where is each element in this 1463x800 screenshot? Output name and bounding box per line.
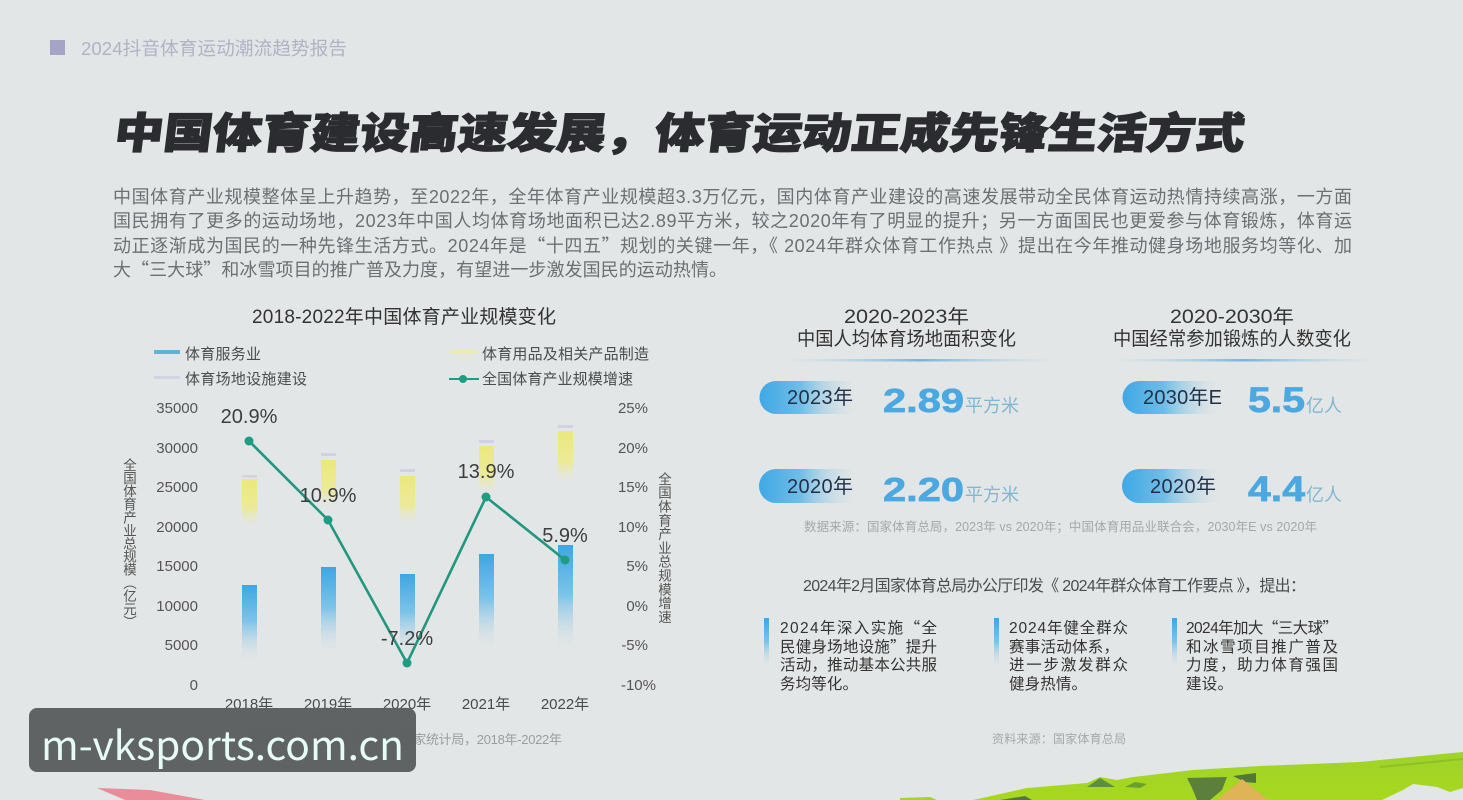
policy item 2: 2024年健全群众 bbox=[1009, 619, 1128, 637]
stat: 2020 bbox=[1122, 469, 1342, 509]
stat: 2020 bbox=[759, 469, 1019, 508]
left axis labels: 25000 bbox=[156, 479, 198, 496]
left axis labels: 30000 bbox=[156, 440, 198, 457]
chart legend: 全国体育产业规模增速 bbox=[482, 370, 633, 388]
x axis labels: 2019年 bbox=[304, 696, 352, 713]
stat: 2023: 2023年 bbox=[787, 386, 853, 409]
intro text block bbox=[113, 187, 1352, 282]
stats source: 数据来源：国家体育总局，2023年 vs 2020年；中国体育用品业联合会，2030年E vs 2020年 bbox=[804, 519, 1317, 534]
panel heading: 2020-2023年 bbox=[844, 306, 969, 328]
data labels: 5.9% bbox=[542, 525, 588, 547]
panel heading bbox=[1113, 306, 1351, 350]
right axis labels: 0% bbox=[626, 598, 648, 615]
watermark: m-vksports.com.cn bbox=[41, 714, 404, 772]
stat: 2030E: 5.5 bbox=[1248, 381, 1305, 420]
left axis labels: 20000 bbox=[156, 519, 198, 536]
decoration: pink ribbon bbox=[97, 788, 205, 800]
left axis labels: 10000 bbox=[156, 598, 198, 615]
right axis labels: 10% bbox=[618, 519, 648, 536]
growth rate line bbox=[244, 436, 570, 668]
policy source: 资料来源：国家体育总局 bbox=[992, 731, 1126, 746]
policy item 3: 和冰雪项目推广普及 bbox=[1186, 638, 1338, 656]
stat: 2030E: 亿人 bbox=[1306, 396, 1342, 416]
policy item 2: 健身热情。 bbox=[1009, 675, 1087, 693]
panel: regular exercisers bbox=[1113, 306, 1370, 509]
intro text block: 大“三大球”和冰雪项目的推广普及力度，有望进一步激发国民的运动热情。 bbox=[113, 256, 727, 282]
stat: 2020: 亿人 bbox=[1306, 485, 1342, 505]
policy item 1: 务均等化。 bbox=[780, 675, 858, 693]
right axis labels: 25% bbox=[618, 400, 648, 417]
stat: 2020: 2.20 bbox=[883, 471, 964, 508]
decoration: grass hill and tent bbox=[900, 752, 1463, 800]
policy item 2: 赛事活动体系， bbox=[1009, 637, 1119, 656]
stat: 2020: 2020年 bbox=[1150, 475, 1216, 498]
left axis labels: 35000 bbox=[156, 400, 198, 417]
stat: 2023: 2.89 bbox=[883, 382, 964, 419]
right axis labels bbox=[618, 400, 656, 694]
left axis labels: 5000 bbox=[165, 637, 198, 654]
stat: 2020: 平方米 bbox=[965, 485, 1019, 505]
intro text block: 动正逐渐成为国民的一种先锋生活方式。2024年是“十四五”规划的关键一年，《 2024年群众体育工作热点 》提出在今年推动健身场地服务均等化、加 bbox=[113, 232, 1352, 258]
left axis labels: 0 bbox=[190, 677, 198, 694]
stacked bars bbox=[242, 425, 573, 665]
data labels: 20.9% bbox=[221, 406, 278, 428]
policy heading: 2024年2月国家体育总局办公厅印发《 2024年群众体育工作要点 》，提出： bbox=[803, 572, 1306, 596]
panel heading: 中国经常参加锻炼的人数变化 bbox=[1113, 328, 1351, 350]
right axis labels: 15% bbox=[618, 479, 648, 496]
chart legend bbox=[154, 346, 649, 388]
intro text block: 中国体育产业规模整体呈上升趋势，至2022年，全年体育产业规模超3.3万亿元，国内体育产业建设的高速发展带动全民体育运动热情持续高涨，一方面 bbox=[113, 187, 1352, 207]
chart title: 2018-2022年中国体育产业规模变化 bbox=[252, 306, 556, 328]
x axis labels: 2021年 bbox=[462, 696, 510, 713]
stat: 2030E bbox=[1122, 381, 1342, 420]
report header: 2024抖音体育运动潮流趋势报告 bbox=[81, 38, 347, 59]
policy item 1: 活动，推动基本公共服 bbox=[780, 656, 937, 674]
stat: 2020: 2020年 bbox=[787, 475, 853, 498]
panel: industry scale chart bbox=[120, 306, 675, 747]
chart source: 数据来源：国家体育总局，国家统计局，2018年-2022年 bbox=[248, 732, 562, 747]
panel heading: 2020-2030年 bbox=[1170, 306, 1294, 328]
left axis labels: 15000 bbox=[156, 558, 198, 575]
stat: 2023 bbox=[760, 381, 1019, 419]
policy item 1: 民健身场地设施”提升 bbox=[780, 635, 937, 657]
panel heading bbox=[797, 306, 1016, 350]
intro text block: 国民拥有了更多的运动场地，2023年中国人均体育场地面积已达2.89平方米，较之2020年有了明显的提升；另一方面国民也更爱参与体育锻炼，体育运 bbox=[113, 211, 1352, 231]
left axis labels bbox=[156, 400, 198, 694]
stat: 2030E: 2030年E bbox=[1143, 386, 1222, 409]
x axis labels: 2018年 bbox=[225, 696, 273, 713]
data labels: 10.9% bbox=[300, 485, 357, 507]
chart legend: 体育场地设施建设 bbox=[185, 371, 307, 388]
x axis labels: 2022年 bbox=[541, 696, 589, 713]
right axis labels: -10% bbox=[621, 677, 656, 694]
data labels: -7.2% bbox=[381, 628, 433, 650]
title: 中国体育建设高速发展，体育运动正成先锋生活方式 bbox=[112, 110, 1248, 157]
policy item 2 bbox=[994, 618, 1128, 693]
policy item 3: 建设。 bbox=[1186, 675, 1233, 693]
right axis labels: 5% bbox=[626, 558, 648, 575]
panel heading: 中国人均体育场地面积变化 bbox=[797, 328, 1016, 350]
left axis title: 全国体育产业总规模（亿元） bbox=[120, 457, 140, 628]
policy item 1: 2024年深入实施“全 bbox=[780, 616, 937, 638]
stat: 2020: 4.4 bbox=[1248, 470, 1306, 509]
data labels bbox=[221, 406, 588, 650]
x axis labels: 2020年 bbox=[383, 696, 431, 713]
chart legend: 体育用品及相关产品制造 bbox=[482, 346, 649, 363]
policy item 3 bbox=[1172, 616, 1338, 693]
policy item 3: 力度，助力体育强国 bbox=[1186, 656, 1338, 674]
policy item 1 bbox=[764, 616, 937, 693]
data labels: 13.9% bbox=[458, 461, 515, 483]
right axis labels: -5% bbox=[621, 637, 648, 654]
panel: per-capita sports area bbox=[759, 306, 1049, 508]
chart legend: 体育服务业 bbox=[185, 346, 261, 363]
x axis labels bbox=[225, 696, 589, 713]
policy item 2: 进一步激发群众 bbox=[1009, 656, 1128, 674]
stat: 2023: 平方米 bbox=[965, 396, 1019, 416]
right axis title: 全国体育产业总规模增速 bbox=[655, 471, 675, 625]
right axis labels: 20% bbox=[618, 440, 648, 457]
policy item 3: 2024年加大“三大球” bbox=[1186, 616, 1338, 638]
